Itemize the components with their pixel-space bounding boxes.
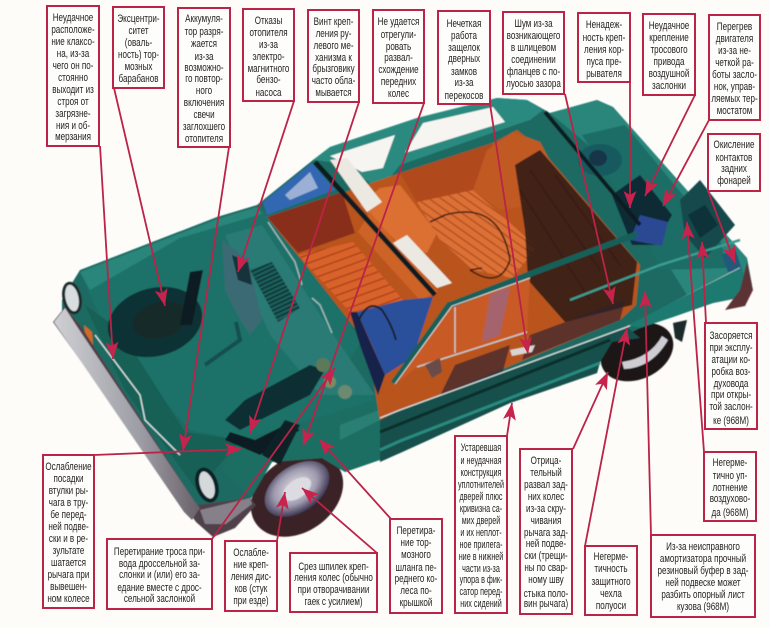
blue floor: [357, 297, 433, 375]
callout: door latches: работа: [451, 29, 478, 41]
callout: steering bolt: брызговику: [312, 62, 355, 74]
callout: steering bolt: мывается: [315, 86, 352, 98]
callout: negative camber: стыка поло-: [524, 587, 568, 599]
windshield glass: [263, 163, 335, 215]
callout: air duct seal: да (968М): [712, 506, 748, 518]
callout: battery: го повтор-: [185, 72, 223, 84]
callout: lever bushing: Ослабление: [45, 460, 92, 472]
callout: steering bolt: ханизма к: [315, 51, 353, 63]
callout: rear buffer: Из-за неисправного: [666, 540, 740, 552]
leader: air duct box: [702, 242, 706, 323]
callout: axle boot: защитного: [591, 575, 631, 587]
callout: door seals: и их неплот-: [460, 527, 502, 538]
leader: air choke cable: [645, 95, 695, 196]
leader: air duct seal: [687, 222, 704, 452]
callout: air duct box: при эксплу-: [709, 341, 753, 353]
callout: negative camber: [520, 449, 572, 614]
callout: air duct seal: воздухово-: [710, 492, 750, 504]
leader: throttle cable: [212, 368, 335, 539]
callout: negative camber: ней подве-: [526, 537, 566, 549]
callout: heater failures: магнитного: [248, 62, 289, 74]
rear wheel: [591, 311, 683, 393]
callout: spline noise: Шум из-за: [514, 17, 553, 29]
callout: lever bushing: зультате: [53, 544, 84, 556]
callout: heater failures: из-за: [259, 38, 279, 50]
leader: rear buffer: [645, 291, 651, 535]
callout: horn: чего он по-: [53, 59, 93, 71]
callout: battery: [178, 8, 230, 147]
callout: lever bushing: бе перед-: [50, 508, 87, 520]
callout: negative camber: ски (трещи-: [524, 549, 568, 561]
callout: door seals: ное прилега-: [460, 539, 502, 550]
callout: disc mount: [225, 541, 277, 611]
roof rail: [315, 162, 435, 295]
callout: negative camber: чивания: [531, 514, 561, 526]
leader: engine overheating: [663, 120, 709, 206]
callout: battery: ного: [196, 84, 212, 96]
callout: steering bolt: ления ру-: [316, 27, 351, 39]
callout: air duct box: духовода: [714, 377, 749, 389]
callout: choke cable: тросового: [650, 43, 688, 55]
callout: heater failures: Отказы: [255, 14, 282, 26]
callout: overheating: двигателя: [716, 32, 753, 44]
callout: horn: Неудачное: [53, 11, 93, 23]
callout: air duct box: атации ко-: [712, 353, 750, 365]
leader: wheel studs: [302, 488, 377, 553]
callout: air duct seal: тично уп-: [713, 469, 747, 481]
callout: heater failures: насоса: [255, 86, 282, 98]
callout: steering bolt: Винт креп-: [314, 15, 353, 27]
leader: brake hose: [319, 439, 391, 519]
callout: disc mount: Ослабле-: [233, 546, 269, 558]
callout: battery: возможно-: [184, 61, 224, 73]
callout: brake drums: [113, 7, 164, 88]
callout: wheel alignment: колес: [388, 87, 409, 99]
roof: [313, 98, 543, 190]
callout: battery: отопителя: [185, 132, 223, 144]
leader: rear light contacts: [708, 191, 735, 263]
spare wheel and shock: [100, 270, 210, 367]
callout: spline noise: луосью зазора: [506, 77, 562, 89]
callout: rear buffer: ней подвеске может: [665, 576, 741, 588]
callout: rear lights: задних: [721, 162, 747, 174]
callout: throttle cable: [107, 539, 212, 609]
callout: door seals: дверей плюс: [459, 491, 503, 502]
callout: heater failures: электро-: [252, 50, 285, 62]
callout: battery: из-за: [194, 50, 214, 62]
callout: battery: заглохшего: [183, 120, 225, 132]
callout: wheel alignment: передних: [381, 75, 416, 87]
callout: door latches: из-за: [454, 76, 474, 88]
callout: distributor mount: рывателя: [586, 67, 622, 79]
callout: overheating: мостатом: [717, 104, 752, 116]
callout: wheel alignment: [373, 10, 424, 103]
callout: wheel studs: [290, 553, 377, 612]
callout: door latches: [438, 11, 490, 104]
callout: wheel alignment: ровать: [386, 40, 411, 52]
callout: door seals: них сидений: [460, 598, 502, 609]
callout: rear lights: контактов: [716, 151, 752, 163]
leader: horn: [100, 146, 113, 359]
door window: [398, 277, 530, 382]
callout: spline noise: соединении: [511, 53, 556, 65]
callout: distributor mount: ления кор-: [584, 43, 624, 55]
callout: brake hose: леса по-: [400, 584, 432, 596]
callout: brake hose: шланга пе-: [395, 561, 437, 573]
car illustration: [53, 98, 753, 554]
callout: brake hose: реднего ко-: [395, 572, 437, 584]
callout: door seals: кривизна са-: [460, 503, 502, 514]
callout: brake drums: ность) тор-: [118, 48, 159, 60]
callout: distributor mount: Ненадеж-: [586, 18, 622, 30]
callout: throttle cable: едание вместе с дрос-: [117, 581, 202, 593]
callout: air duct box: при откры-: [711, 388, 751, 400]
callout: horn: загрязне-: [55, 107, 91, 119]
callout: lever bushing: чага в тру-: [49, 496, 88, 508]
callout: horn: ния и об-: [56, 119, 90, 131]
callout: door seals: уплотнителей: [458, 479, 504, 490]
leader: brake drums: [114, 88, 165, 306]
callout: wheel studs: при отворачивании: [298, 583, 369, 595]
callout: wheel studs: гаек с усилием): [304, 595, 363, 607]
callout: choke cable: заслонки: [652, 79, 686, 91]
callout: rear lights: фонарей: [717, 174, 751, 186]
callout: air duct seal: лотнение: [712, 481, 748, 493]
callout: battery: жается: [191, 37, 217, 49]
callout: spline noise: в шлицевом: [511, 41, 556, 53]
callout: battery: свечи: [193, 108, 215, 120]
leader: axle boot: [585, 328, 627, 546]
dark rear structure: [515, 150, 637, 322]
cabin interior: [267, 130, 640, 422]
trunk: [550, 100, 747, 300]
callout: lever bushing: вывешен-: [50, 580, 87, 592]
car body: [62, 98, 752, 520]
leader: steering bolt: [250, 102, 359, 433]
callout: heater failures: [243, 9, 294, 101]
leader: disc mount: [277, 492, 285, 541]
callout: horn: ние клаксо-: [51, 35, 95, 47]
wipers vent grilles: [250, 262, 300, 322]
callout: axle boot: тичность: [594, 562, 628, 574]
leader: lever bushing: [94, 449, 242, 455]
callout: heater failures: отопителя: [249, 26, 288, 38]
callout: horn: строя от: [57, 95, 89, 107]
callout: negative camber: развал зад-: [524, 478, 568, 490]
callout: battery: включения: [184, 96, 224, 108]
lower door shading: [435, 300, 625, 406]
callout: rear lights: [708, 134, 760, 191]
callout: battery: тор разря-: [185, 25, 223, 37]
callout: wheel studs: Срез шпилек креп-: [298, 560, 369, 572]
callout: disc mount: ние креп-: [233, 558, 269, 570]
callout: door seals: [455, 436, 507, 613]
callout: wheel alignment: Не удается: [378, 15, 419, 27]
callout: choke cable: привода: [654, 55, 685, 67]
callout: choke cable: воздушной: [649, 67, 689, 79]
callout: brake drums: мозных: [125, 60, 153, 72]
callout: wheel alignment: схождение: [378, 63, 419, 75]
callout: horn: на, из-за: [57, 47, 90, 59]
callout: choke cable: крепление: [649, 31, 689, 43]
callout: air duct seal: [704, 452, 756, 521]
callout: air duct box: Засоряется: [710, 329, 752, 341]
leader: battery heater: [183, 147, 229, 451]
callout: air duct box: робка воз-: [712, 365, 750, 377]
white visors: [330, 158, 452, 288]
hood: [80, 207, 375, 440]
callout: door seals: конструкция: [461, 467, 501, 478]
callout: overheating: боты засло-: [712, 68, 757, 80]
callout: door seals: Устаревшая: [461, 442, 501, 453]
callout: door seals: части из-за: [462, 563, 501, 574]
callout: brake hose: ние тор-: [401, 536, 431, 548]
callout: steering bolt: левого ме-: [313, 39, 354, 51]
callout: negative camber: них колес: [528, 490, 564, 502]
callout: door seals: и неудачная: [461, 455, 502, 466]
callout: brake hose: Перетира-: [397, 524, 435, 536]
callout: lever bushing: [43, 455, 94, 608]
callout: door latches: защелок: [448, 41, 481, 53]
engine: [222, 240, 262, 335]
callout: lever bushing: втулки ры-: [49, 484, 88, 496]
callout: door seals: ние в нижней: [459, 551, 503, 562]
radiator and batteries: [225, 358, 352, 465]
front bumper: [53, 307, 256, 537]
callout: negative camber: тельный: [530, 466, 562, 478]
callout: rear buffer: кузова (968М): [677, 600, 729, 612]
callout: heater failures: бензо-: [256, 73, 281, 85]
callout: throttle cable: Перетирание троса при-: [114, 545, 205, 557]
callout: battery: Аккумуля-: [185, 12, 223, 24]
front cushion: [298, 242, 403, 312]
callout: door latches: дверных: [448, 52, 480, 64]
callout: negative camber: ны по свар-: [524, 561, 568, 573]
leader: heater fuel pump: [238, 101, 294, 272]
callout: distributor mount: ность креп-: [583, 31, 625, 43]
callout: overheating: из-за не-: [718, 44, 751, 56]
callout: horn: выходит из: [52, 83, 94, 95]
nose and front fender: [85, 305, 240, 495]
callout: air duct seal: Негерме-: [713, 456, 747, 468]
callout: negative camber: вин рычага): [524, 597, 568, 609]
callout: rear lights: Окисление: [714, 138, 754, 150]
callout: axle boot: Негерме-: [594, 550, 628, 562]
callout: wheel alignment: развал-: [384, 51, 413, 63]
callout: overheating: [709, 15, 760, 120]
callout: overheating: Перегрев: [717, 20, 752, 32]
leader: door latches: [490, 104, 528, 354]
callout: throttle cable: вода дроссельной за-: [119, 557, 200, 569]
callout: steering bolt: [308, 10, 359, 102]
callout: steering bolt: часто обла-: [312, 74, 355, 86]
callout: lever bushing: ном колесе: [47, 592, 90, 604]
callout: air duct box: ке (968М): [713, 414, 749, 426]
callout: door seals: упора в фик-: [460, 574, 502, 585]
lower door strip: [380, 327, 640, 462]
leader: door seals: [507, 403, 512, 436]
callout: choke cable: [643, 14, 695, 95]
callout: spline noise: возникающего: [507, 29, 560, 41]
callout: door latches: замков: [451, 65, 477, 77]
callout: wheel studs: ления колес (обычно: [294, 571, 373, 583]
leader: distributor mount: [629, 82, 631, 208]
callout: lever bushing: посадки: [53, 472, 84, 484]
leader: negative camber: [573, 372, 608, 449]
callout: disc mount: ления дис-: [231, 570, 271, 582]
callout: lever bushing: ней подве-: [48, 520, 89, 532]
callout: door seals: сатор перед-: [460, 586, 502, 597]
callout: rear buffer: резиновый буфер в зад-: [658, 564, 748, 576]
callout: rear buffer: разбить опорный лист: [661, 588, 745, 600]
callout: brake drums: ситет: [128, 24, 149, 36]
callout: overheating: нок, управ-: [714, 80, 755, 92]
rear engine bay: [578, 144, 742, 272]
callout: horn: расположе-: [51, 23, 95, 35]
callout: door latches: Нечеткая: [447, 17, 481, 29]
callout: axle boot: полуоси: [596, 599, 626, 611]
callout: disc mount: ков (стук: [235, 582, 268, 594]
callout: spline noise: фланцев с по-: [507, 65, 560, 77]
callout: wheel alignment: отрегули-: [381, 28, 416, 40]
callout: axle boot: чехла: [600, 587, 622, 599]
callout: brake drums: барабанов: [119, 72, 158, 84]
callout: throttle cable: сельной заслонкой: [124, 592, 195, 604]
callout: lever bushing: шатается: [51, 556, 86, 568]
callout: lever bushing: ски и в ре-: [49, 532, 88, 544]
callout: negative camber: из-за скру-: [526, 502, 566, 514]
white glass: [330, 107, 505, 172]
rear body: [628, 268, 752, 328]
callout: door latches: перекосов: [445, 89, 483, 101]
callout: negative camber: Отрица-: [531, 454, 561, 466]
callout: brake drums: (оваль-: [125, 36, 152, 48]
callout: distributor mount: [578, 13, 630, 82]
callout: rear buffer: амортизатора прочный: [660, 552, 746, 564]
leader: wheel alignment: [303, 103, 424, 446]
dash wood panel: [267, 192, 355, 253]
callout: brake hose: [390, 519, 442, 613]
front headlights and left headlight: [61, 282, 221, 503]
callout: negative camber: рычага зад-: [524, 526, 568, 538]
callout: horn: [47, 6, 99, 146]
callout: overheating: четкой ра-: [715, 56, 754, 68]
callout: axle boot: [585, 546, 637, 615]
callout: choke cable: Неудачное: [649, 19, 689, 31]
callout: brake hose: мозного: [401, 548, 431, 560]
callout: rear buffer: [651, 535, 755, 617]
callout: throttle cable: слонки и (или) его за-: [119, 568, 200, 580]
callout: door seals: мих дверей: [462, 515, 500, 526]
callout: overheating: ляемых тер-: [711, 92, 758, 104]
front wheel: [235, 436, 359, 554]
callout: lever bushing: рычага при: [48, 568, 89, 580]
callout: negative camber: ному шву: [528, 573, 564, 585]
callout: air duct box: [705, 323, 757, 429]
callout: horn: мерзания: [55, 130, 91, 142]
callout: air duct box: той заслон-: [709, 400, 753, 412]
callout: brake drums: Эксцентри-: [117, 12, 160, 24]
rear wall and seat: [400, 143, 493, 202]
callout: horn: стоянно: [58, 71, 88, 83]
leader: spline noise: [565, 94, 613, 304]
callout: spline noise: [503, 12, 564, 94]
callout: disc mount: при езде): [233, 594, 269, 606]
callout: brake hose: крышкой: [400, 596, 432, 608]
callout: distributor mount: пуса пре-: [586, 55, 622, 67]
